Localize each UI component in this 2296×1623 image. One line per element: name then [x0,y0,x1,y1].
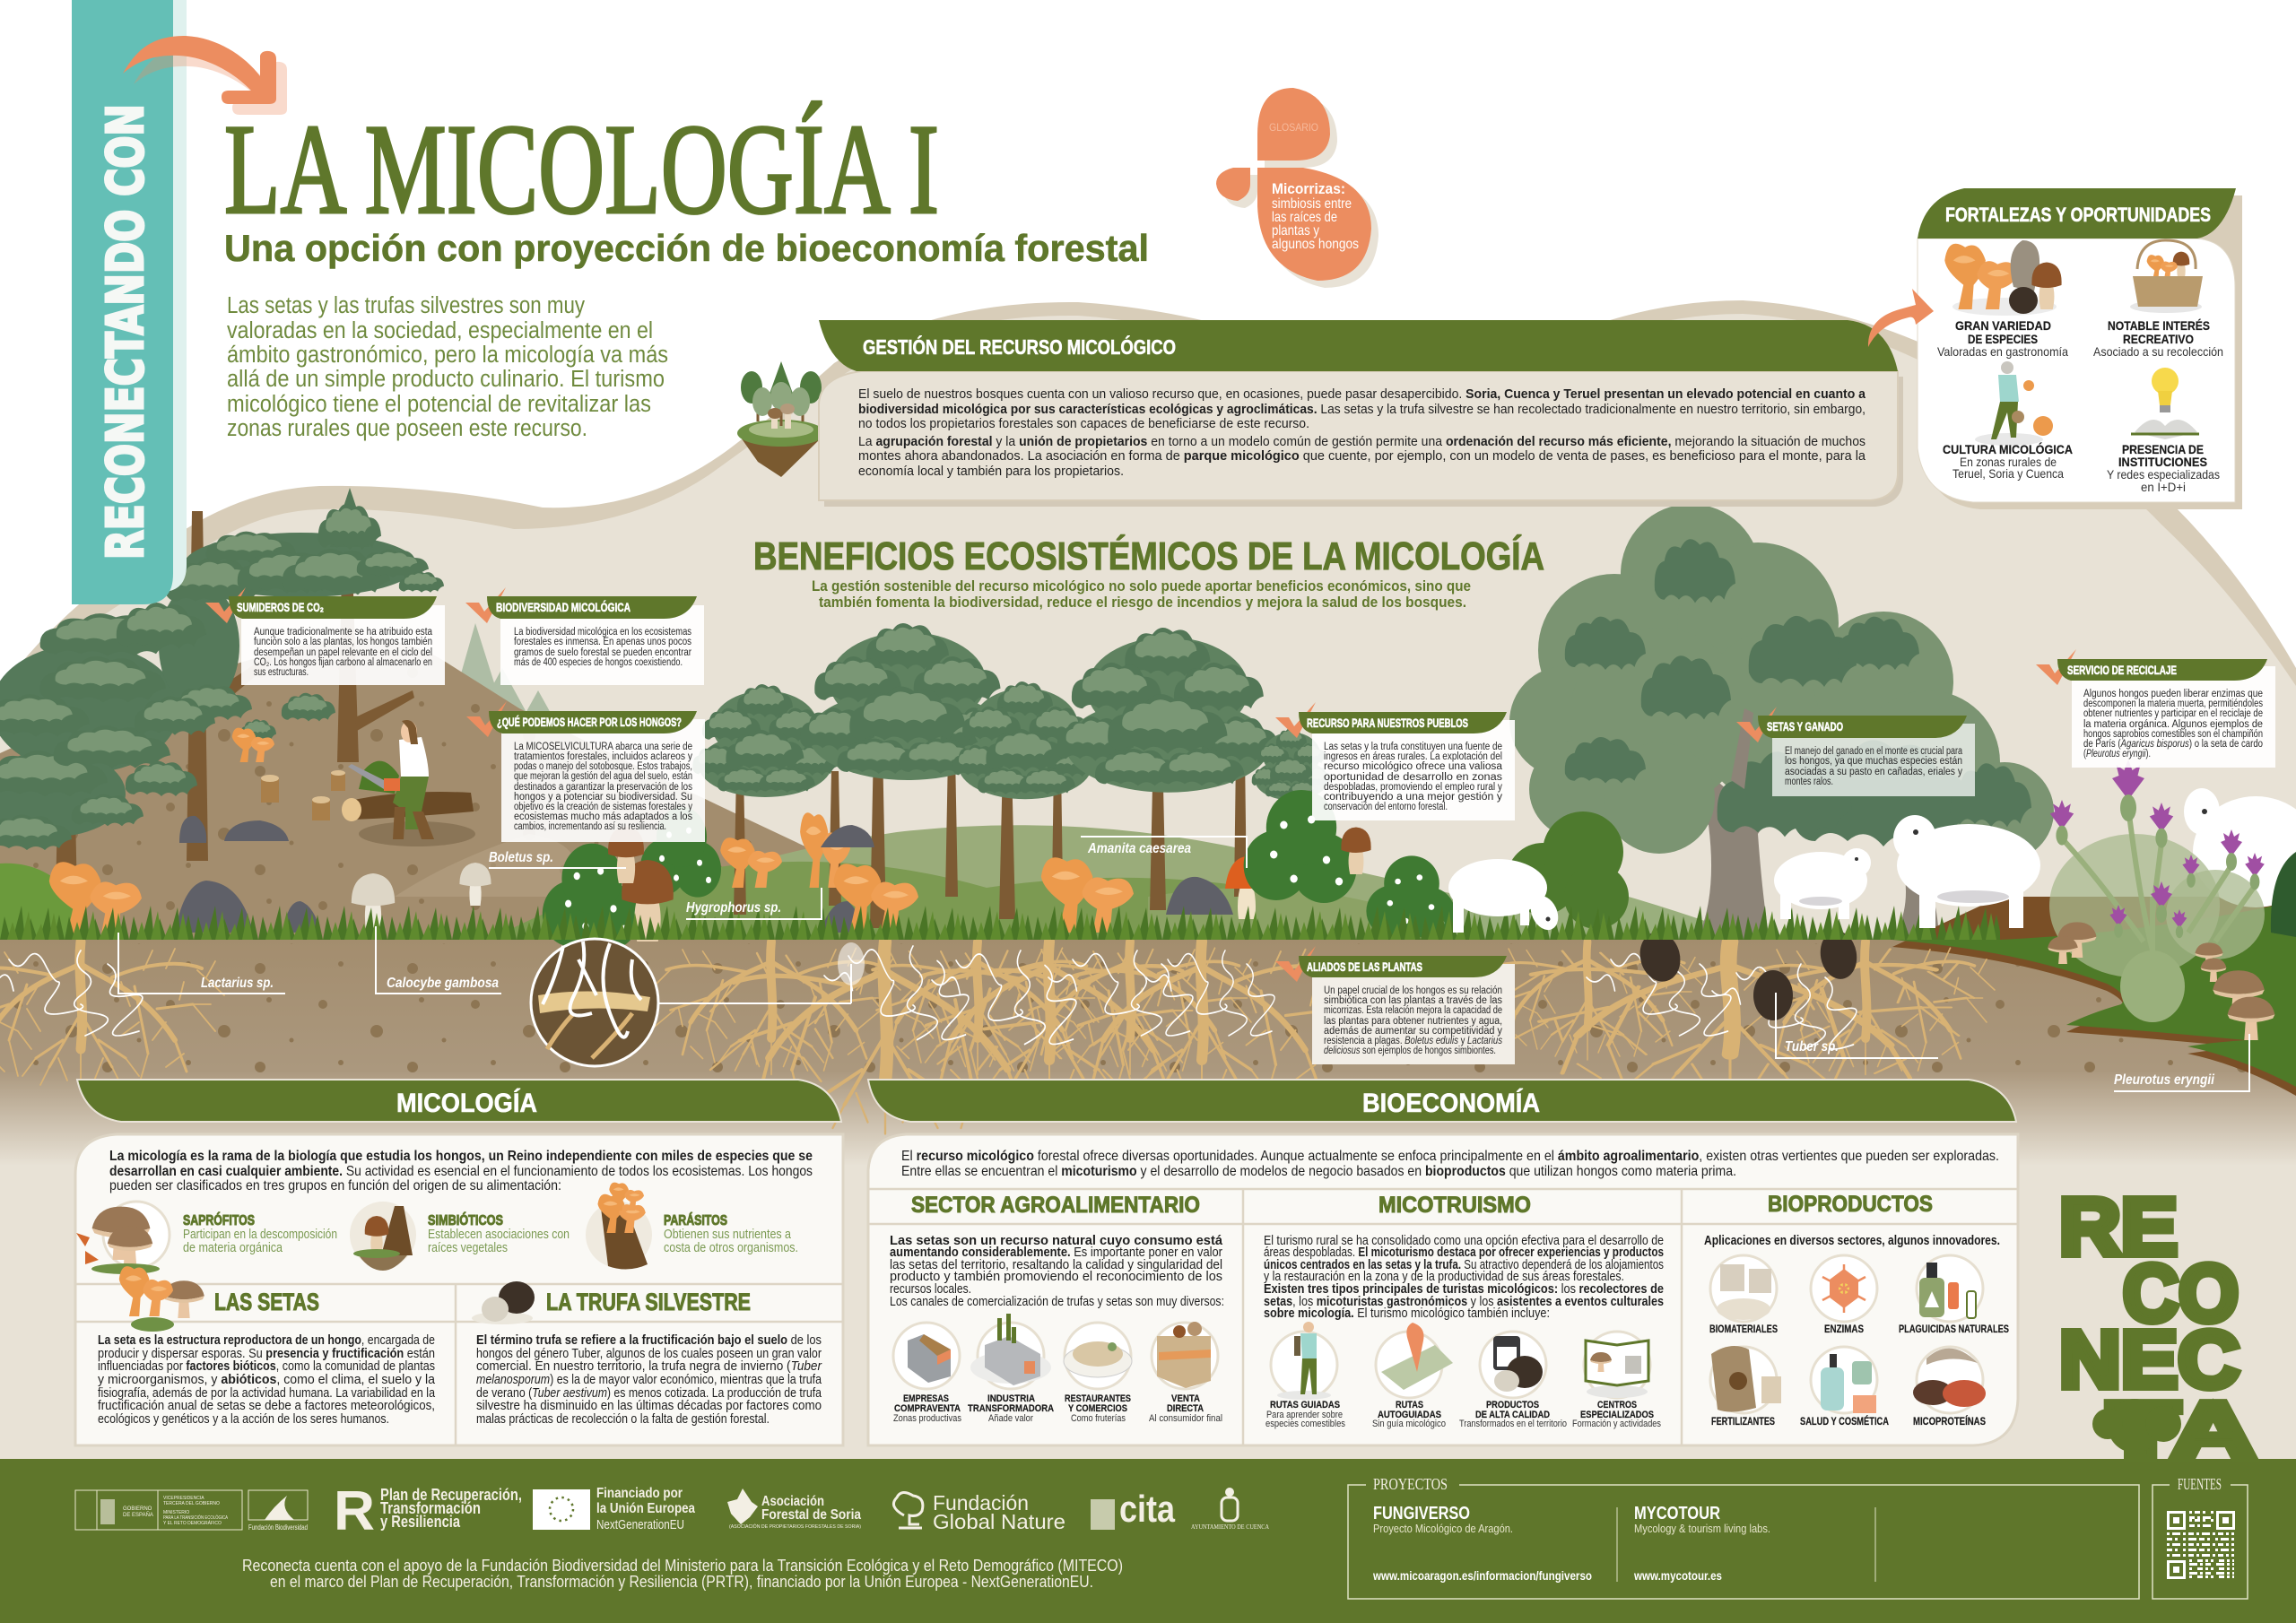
logo: gobierno de españa: PARA LA TRANSICIÓN ECOLÓGICA [163,1515,229,1521]
panel: bioeconomía [868,1080,2018,1445]
logo: gobierno de españa: TERCERA DEL GOBIERNO [163,1501,220,1506]
footer acknowledgement text: en el marco del Plan de Recuperación, Transformación y Resiliencia (PRTR), financiado por la Unión Europea - NextGenerationEU. [270,1573,1093,1591]
card: setas y ganado: los hongos, ya que muchas especies están [1785,756,1962,767]
footer box: proyectos: MYCOTOUR [1634,1504,1720,1523]
text: sector agroalimentario [890,1233,1224,1309]
heading: la trufa silvestre: LA TRUFA SILVESTRE [546,1289,751,1315]
text: sector item labels: Añade valor [988,1413,1033,1424]
footer box: proyectos: Proyecto Micológico de Aragón. [1373,1522,1513,1535]
card: aliados de las plantas [1275,946,1515,1064]
magnified root detail [531,939,865,1066]
heading: bioeconomía: BIOECONOMÍA [1362,1088,1540,1118]
glossary petals [1216,88,1378,288]
logo: cita [1091,1488,1176,1530]
icon: parásitos [586,1183,652,1270]
glossary petals: algunos hongos [1272,237,1359,252]
species labels with leader lines: Hygrophorus sp. [686,900,781,916]
text: food groups: Obtienen sus nutrientes a [664,1227,792,1242]
panel: gestión del recurso micológico [819,320,1903,507]
text: sector item labels: Como fruterías [1071,1413,1126,1424]
species labels with leader lines [118,837,2249,1091]
card: qué podemos hacer por los hongos: destinados a garantizar la preservación de los [514,782,692,793]
logo: plan de recuperación: Transformación [380,1499,481,1517]
text: bioproductos labels [1709,1324,2009,1428]
text: sector agroalimentario: aumentando considerablemente. Es importante poner en valor [890,1245,1222,1260]
text: sector agroalimentario: Los canales de comercialización de trufas y setas son muy diversos: [890,1294,1224,1309]
icon: mushrooms variety [1944,240,2062,316]
text: la trufa body [476,1332,822,1427]
text: micoturismo item labels: CENTROS [1597,1400,1637,1410]
reconecta logo: NEC [2059,1315,2239,1405]
card: recurso para nuestros pueblos: conservación del entorno forestal. [1324,802,1448,812]
text: micoturismo item labels: RUTAS [1396,1400,1423,1410]
card: aliados de las plantas: micorrizas. Esta relación mejora la capacidad de [1324,1005,1502,1016]
text: micoturismo: y la restauración en la zona y de la productividad de sus áreas forestales. [1264,1269,1624,1284]
text: fortalezas labels: Valoradas en gastronomía [1937,344,2068,359]
card: setas y ganado: montes ralos. [1785,777,1833,787]
heading: las setas: LAS SETAS [214,1289,319,1315]
logo: unión europea: NextGenerationEU [596,1517,684,1532]
footer band [0,1459,2296,1623]
card: sumideros de CO2: sus estructuras. [254,667,309,678]
underground soil [0,940,2296,1173]
footer funder logos [75,1480,1269,1542]
footer box: proyectos: FUNGIVERSO [1373,1504,1470,1523]
card: setas y ganado: El manejo del ganado en el monte es crucial para [1785,746,1962,757]
text: micoturismo: setas, los micoturistas gastronómicos y los asistentes a eventos culturales [1264,1294,1664,1309]
text: fortalezas labels: RECREATIVO [2123,332,2194,346]
text: fortalezas labels: Y redes especializadas [2107,467,2220,482]
text: micología intro: La micología es la rama de la biología que estudia los hongos, un Reino independiente con miles de especies que se [109,1149,813,1164]
mushrooms, rocks and bushes [0,790,1629,949]
heading: micotruismo: MICOTRUISMO [1378,1193,1531,1218]
sheep [1448,788,2296,934]
text: fortalezas labels: DE ESPECIES [1968,332,2038,346]
card: qué podemos hacer por los hongos [466,701,705,842]
logo: asociación forestal de soria: (ASOCIACIÓN DE PROPIETARIOS FORESTALES DE SORIA) [729,1523,861,1530]
text: bioproductos labels: BIOMATERIALES [1709,1324,1778,1335]
card: servicio de reciclaje: la materia orgánica. Algunos ejemplos de [2083,719,2263,730]
text: sector agroalimentario: Las setas son un recurso natural cuyo consumo está [890,1233,1223,1248]
text: gestión body: economía local y también para los propietarios. [858,464,1124,479]
card: qué podemos hacer por los hongos: que mejoran la gestión del agua del suelo, están [514,771,692,782]
footer acknowledgement text: Reconecta cuenta con el apoyo de la Fundación Biodiversidad del Ministerio para la Transición Ecológica y el Reto Demográfico (MITECO) [242,1557,1123,1575]
text: fortalezas labels: INSTITUCIONES [2118,455,2207,469]
text: sector item labels [893,1393,1222,1424]
heading: fortalezas: FORTALEZAS Y OPORTUNIDADES [1945,204,2211,226]
text: micoturismo item labels [1265,1400,1661,1429]
logger with chainsaw [179,720,475,846]
text: food groups: raíces vegetales [428,1240,508,1255]
text: la trufa body: melanosporum) es la de mayor valor económico, mientras que la trufa [476,1372,822,1387]
forest on the left [0,488,444,897]
text: bioproductos labels: MICOPROTEÍNAS [1913,1416,1986,1428]
card: qué podemos hacer por los hongos: hongos y a potenciar su biodiversidad. Su [514,792,692,803]
text: fortalezas labels: en I+D+i [2141,480,2186,494]
footer box: proyectos: Mycology & tourism living labs. [1634,1522,1770,1535]
logo: gobierno de españa: MINISTERIO [163,1510,189,1515]
icons: micoturismo [1271,1322,1650,1400]
text: fortalezas labels: GRAN VARIEDAD [1955,318,2051,333]
card: aliados de las plantas: además de aumentar su competitividad y [1324,1026,1502,1037]
text: gestión body: no todos los propietarios forestales son capaces de beneficiarse de este recurso. [858,416,1309,431]
footer box: proyectos: www.micoaragon.es/informacion/fungiverso [1372,1568,1592,1583]
text: food groups: SIMBIÓTICOS [428,1211,503,1228]
card: qué podemos hacer por los hongos: La MICOSELVICULTURA abarca una serie de [514,742,692,752]
card: biodiversidad micológica: forestales es inmensa. En apenas unos pocos [514,637,691,647]
reconecta logo: TA [2108,1386,2256,1476]
icon: trufa [472,1281,535,1324]
card: sumideros de CO2: Aunque tradicionalmente se ha atribuido esta [254,627,433,638]
heading: sector agroalimentario: SECTOR AGROALIMENTARIO [911,1193,1200,1218]
species labels with leader lines: Tuber sp. [1785,1039,1839,1055]
text: sector item labels: VENTA [1171,1393,1200,1404]
text: bioeconomía intro: Entre ellas se encuentran el micoturismo y el desarrollo de modelos de negocio basados en bioproductos que utilizan hongos como materia prima. [901,1164,1736,1179]
text: sector item labels: INDUSTRIA [987,1393,1035,1404]
text: las setas body: fructificación anual de setas se debe a factores meteorológicos, [98,1398,435,1413]
card: biodiversidad micológica [465,587,704,685]
logo: gobierno de españa: Y EL RETO DEMOGRÁFICO [163,1520,222,1526]
left title band [72,0,187,604]
text: bioproductos labels: SALUD Y COSMÉTICA [1800,1416,1889,1428]
panel: micología [75,1080,843,1445]
text: la trufa body: malas prácticas de recolección o la falta de gestión forestal. [476,1411,770,1427]
card: servicio de reciclaje: SERVICIO DE RECICLAJE [2067,663,2177,677]
species labels with leader lines: Boletus sp. [489,850,553,865]
logo: fundación biodiversidad [248,1490,308,1532]
text: micoturismo item labels: ESPECIALIZADOS [1580,1410,1654,1420]
text: gestión body: biodiversidad micológica por sus características ecológicas y agroclimáticas. Las setas y la trufa silvestre se han recolectado tradicionalmente en nuestro territorio, sin embargo, [858,402,1866,417]
card: sumideros de CO2 [205,587,445,685]
reconecta logo [2059,1183,2256,1476]
text: food groups: PARÁSITOS [664,1211,727,1228]
subtitle: Una opción con proyección de bioeconomía forestal [224,227,1149,269]
card: recurso para nuestros pueblos [1275,702,1515,820]
card: qué podemos hacer por los hongos: cambios, incrementando así su resiliencia. [514,821,666,832]
logo: fundación biodiversidad: Fundación Biodiversidad [248,1523,308,1532]
card: qué podemos hacer por los hongos: ¿QUÉ PODEMOS HACER POR LOS HONGOS? [497,715,682,729]
logo: unión europea [533,1486,695,1532]
footer box: fuentes with QR [2152,1475,2248,1599]
intro paragraph: Las setas y las trufas silvestres son muy [227,293,585,318]
intro paragraph: ámbito gastronómico, pero la micología va más [227,343,668,368]
text: sector item labels: TRANSFORMADORA [968,1403,1054,1414]
text: food groups: de materia orgánica [183,1240,283,1255]
text: micoturismo item labels: RUTAS GUIADAS [1270,1400,1340,1410]
text: micoturismo [1264,1233,1664,1321]
heading: gestión [819,320,1898,371]
text: micoturismo item labels: Formación y actividades [1572,1419,1661,1429]
text: micoturismo: áreas despobladas. El micoturismo destaca por ofrecer experiencias y productos [1264,1245,1664,1260]
icon: saprófitos [76,1202,170,1274]
text: sector agroalimentario: producto y también promoviendo el reconocimiento de los [890,1269,1222,1284]
card: servicio de reciclaje: de París (Agaricus bisporus) o la seta de cardo [2083,739,2263,750]
logo: gobierno de españa: VICEPRESIDENCIA [163,1496,204,1501]
text: micoturismo: únicos centrados en las setas y la trufa. Su atractivo dependerá de los alojamientos [1264,1257,1664,1272]
text: food groups: SAPRÓFITOS [183,1211,255,1228]
text: gestión body [858,386,1866,479]
text: sector item labels: COMPRAVENTA [894,1403,961,1414]
card: aliados de las plantas: las plantas para obtener nutrientes y agua, [1324,1016,1502,1027]
text: la trufa body: hongos del género Tuber, algunos de los cuales poseen un gran valor [476,1346,822,1361]
text: food groups [183,1211,798,1255]
text: fortalezas labels: Teruel, Soria y Cuenca [1952,466,2064,481]
logo: fundación global nature [893,1491,1065,1533]
logo: plan de recuperación: Plan de Recuperación, [380,1486,522,1504]
icon: basket [2130,240,2203,313]
text: la trufa body: comercial. En nuestro territorio, la trufa negra de invierno (Tuber [476,1358,822,1374]
species labels with leader lines: Lactarius sp. [201,976,274,991]
text: micología intro: pueden ser clasificados en tres grupos en función del origen de su alimentación: [109,1178,561,1193]
card: servicio de reciclaje: Algunos hongos pueden liberar enzimas que [2083,689,2263,699]
text: la trufa body: silvestre ha disminuido en las últimas décadas por factores como [476,1398,822,1413]
panel: fortalezas y oportunidades [1918,188,2242,509]
card: qué podemos hacer por los hongos: objetivo es la creación de sistemas forestales y [514,802,692,812]
subheading: beneficios [812,577,1471,611]
heading: beneficios ecosistémicos: BENEFICIOS ECOSISTÉMICOS DE LA MICOLOGÍA [753,534,1544,578]
text: bioproductos labels: FERTILIZANTES [1711,1417,1775,1428]
truffles [1635,927,1860,1020]
glossary petals: plantas y [1272,223,1319,239]
thistle plants and pleurotus [2048,759,2296,1040]
woodland in the middle [692,623,1331,928]
intro paragraph: allá de un simple producto culinario. El turismo [227,367,665,392]
card: setas y ganado: asociadas a su pasto en cañadas, eriales y [1785,767,1962,777]
text: fortalezas labels [1937,318,2223,494]
heading: bioeconomía [868,1080,2016,1122]
distant pale pine forest [451,623,561,731]
island illustration [737,361,825,477]
text: micología intro: desarrollan en casi cualquier ambiente. Su actividad es esencial en el funcionamiento de todos los ecosistemas. Los hongos [109,1164,813,1179]
intro paragraph: micológico tiene el potencial de revitalizar las [227,392,651,417]
logo: gobierno de españa: DE ESPAÑA [123,1512,153,1518]
card: recurso para nuestros pueblos: Las setas y la trufa constituyen una fuente de [1324,742,1502,752]
heading: gestión: GESTIÓN DEL RECURSO MICOLÓGICO [863,334,1176,359]
card: recurso para nuestros pueblos: ingresos en áreas rurales. La explotación del [1324,751,1502,762]
text: bioeconomía intro: El recurso micológico forestal ofrece diversas oportunidades. Aunque actualmente se enfoca principalmente en el ámbito agroalimentario, existen otras vertientes que pueden ser exploradas. [901,1149,1999,1164]
card: aliados de las plantas: resistencia a plagas. Boletus edulis y Lactarius [1324,1036,1502,1046]
logo: cita: cita [1119,1488,1176,1530]
text: sector agroalimentario: recursos locales. [890,1281,971,1297]
glossary petals: GLOSARIO [1269,121,1318,134]
logo: unión europea: Financiado por [596,1486,683,1501]
text: food groups: Establecen asociaciones con [428,1227,570,1242]
logo: plan de recuperación: y Resiliencia [380,1513,461,1531]
card: aliados de las plantas: deliciosus son ejemplos de hongos simbiontes. [1324,1046,1496,1056]
text: sector item labels: RESTAURANTES [1065,1393,1131,1404]
text: micología intro [109,1149,813,1193]
subheading: beneficios: también fomenta la biodiversidad, reduce el riesgo de incendios y mejora la salud de los bosques. [819,594,1466,611]
text: sector item labels: Al consumidor final [1149,1413,1222,1424]
text: sector item labels: EMPRESAS [903,1393,949,1404]
intro paragraph [227,293,668,441]
card: recurso para nuestros pueblos: contribuyendo a una mejor gestión y [1324,792,1502,803]
icon: QR code [2167,1512,2234,1578]
card: recurso para nuestros pueblos: RECURSO PARA NUESTROS PUEBLOS [1307,716,1468,730]
text: las setas body: fisiografía, además de por la actividad humana. La variabilidad en la [98,1385,436,1401]
text: food groups: costa de otros organismos. [664,1240,798,1255]
text: sector agroalimentario: las setas del territorio, resaltando la calidad y singularidad del [890,1257,1222,1272]
card: aliados de las plantas: simbiótica con las plantas a través de las [1324,995,1502,1006]
card: aliados de las plantas: ALIADOS DE LAS PLANTAS [1307,959,1422,974]
card: servicio de reciclaje: (Pleurotus eryngii). [2083,749,2151,759]
card: qué podemos hacer por los hongos: ecosistemas mucho más adaptados a los [514,812,692,822]
logo: asociación forestal de soria: Forestal de Soria [761,1507,861,1523]
text: micoturismo item labels: PRODUCTOS [1486,1400,1539,1410]
footer box: proyectos [1348,1475,2139,1599]
logo: unión europea: la Unión Europea [596,1501,695,1516]
icons: sector agroalimentario [893,1314,1218,1389]
text: sector item labels: Zonas productivas [893,1413,961,1424]
reconecta logo: RE [2059,1183,2178,1272]
text: micoturismo: sobre micología. El turismo micológico también incluye: [1264,1306,1550,1321]
species labels with leader lines: Amanita caesarea [1087,841,1191,856]
card: recurso para nuestros pueblos: despobladas, promoviendo el empleo rural y [1324,782,1502,793]
card: biodiversidad micológica: gramos de suelo forestal se pueden encontrar [514,647,691,658]
green meadow hills [491,825,1758,940]
text: bioproductos labels: PLAGUICIDAS NATURALES [1899,1324,2009,1335]
text: gestión body: El suelo de nuestros bosques cuenta con un valioso recurso que, en ocasiones, puede pasar desapercibido. Soria, Cuenca y Teruel presentan un elevado potencial en cuanto a [858,386,1866,402]
text: bioproductos intro: Aplicaciones en diversos sectores, algunos innovadores. [1704,1233,2000,1248]
brown hillside [0,638,834,940]
arrow to fortalezas [1868,289,1934,347]
text: las setas body: influenciadas por factores bióticos, como la comunidad de plantas [98,1358,435,1374]
text: fortalezas labels: CULTURA MICOLÓGICA [1943,441,2073,456]
grass strip [0,904,2000,942]
text: sector item labels: DIRECTA [1167,1403,1204,1414]
species labels with leader lines: Pleurotus eryngii [2114,1072,2214,1088]
species labels with leader lines: Calocybe gambosa [387,976,499,991]
card: servicio de reciclaje [2036,649,2275,768]
card: recurso para nuestros pueblos: oportunidad de desarrollo en zonas [1324,772,1502,783]
text: las setas body [98,1332,436,1427]
logo: fundación global nature: Global Nature [933,1510,1065,1533]
text: micoturismo item labels: AUTOGUIADAS [1378,1410,1441,1420]
text: micoturismo: El turismo rural se ha consolidado como una opción efectiva para el desarrollo de [1264,1233,1664,1248]
logo: ayuntamiento de cuenca: AYUNTAMIENTO DE CUENCA [1191,1523,1269,1531]
intro paragraph: valoradas en la sociedad, especialmente en el [227,318,653,343]
glossary petals: las raíces de [1272,210,1337,225]
footer acknowledgement text [242,1557,1123,1591]
text: micoturismo: Existen tres tipos principales de turistas micológicos: los recolectores de [1264,1281,1664,1297]
logo: gobierno de españa [75,1490,242,1530]
text: fortalezas labels: PRESENCIA DE [2122,442,2204,456]
intro paragraph: zonas rurales que poseen este recurso. [227,416,587,441]
footer box: proyectos: PROYECTOS [1373,1475,1448,1493]
heading: bioproductos: BIOPRODUCTOS [1768,1192,1933,1217]
reconecta logo: CO [2123,1249,2239,1339]
text: fortalezas labels: NOTABLE INTERÉS [2108,318,2210,333]
subheading: beneficios: La gestión sostenible del recurso micológico no solo puede aportar beneficios económicos, sino que [812,577,1471,595]
text: micoturismo item labels: Sin guía micológico [1372,1419,1446,1429]
text: sector item labels: Y COMERCIOS [1068,1403,1127,1414]
logo: plan de recuperación [334,1480,522,1542]
text: bioeconomía intro [901,1149,1999,1179]
card: biodiversidad micológica: más de 400 especies de hongos coexistiendo. [514,657,683,668]
heading: fortalezas [1918,188,2236,239]
text: gestión body: montes ahora abandonados. La asociación en forma de parque micológico que cuente, por ejemplo, con un modelo de venta de pases, es beneficioso para el monte, para la [858,448,1866,464]
card: aliados de las plantas: Un papel crucial de los hongos es su relación [1324,985,1502,996]
card: sumideros de CO2: CO₂. Los hongos fijan carbono al almacenarlo en [254,657,432,668]
logo: plan de recuperación: R [334,1480,375,1542]
text: las setas body: producir y dispersar esporas. Su presencia y fructificación están [98,1346,435,1361]
text: bioproductos labels: ENZIMAS [1824,1324,1864,1335]
card: qué podemos hacer por los hongos: podas o manejo del sotobosque. Estos trabajos, [514,761,692,772]
main title: LA MICOLOGÍA I [224,99,939,241]
icon: woman gathering [1975,361,2053,446]
orange title arrow [123,36,287,115]
card: sumideros de CO2: desempeñan un papel relevante en el ciclo del [254,647,432,658]
logo: asociación forestal de soria [727,1488,861,1530]
logo: ayuntamiento de cuenca [1191,1488,1269,1531]
icon: setas group [119,1266,204,1332]
heading: micología [77,1080,841,1122]
text: gestión body: La agrupación forestal y la unión de propietarios en torno a un modelo común de gestión permite una ordenación del recurso más eficiente, mejorando la situación de muchos [858,434,1866,449]
logo: gobierno de españa: GOBIERNO [123,1506,152,1512]
glossary petals: Micorrizas: [1272,180,1345,197]
text: micoturismo item labels: Transformados en el territorio [1459,1419,1567,1429]
card: servicio de reciclaje: obtener nutrientes y participar en el reciclaje de [2083,708,2263,719]
text: la trufa body: El término trufa se refiere a la fructificación bajo el suelo de los [476,1332,822,1348]
card: setas y ganado: SETAS Y GANADO [1767,719,1843,733]
card: sumideros de CO2: función solo a las plantas, los hongos también [254,637,432,647]
text: micoturismo item labels: Para aprender sobre [1266,1410,1343,1420]
logo: asociación forestal de soria: Asociación [761,1494,824,1509]
text: las setas body: La seta es la estructura reproductora de un hongo, encargada de [98,1332,435,1348]
text: food groups: Participan en la descomposición [183,1227,337,1242]
text: fortalezas labels: Asociado a su recolección [2093,344,2223,359]
card: sumideros de CO2: SUMIDEROS DE CO₂ [237,600,324,614]
card: biodiversidad micológica: BIODIVERSIDAD MICOLÓGICA [496,599,631,614]
icons: bioproductos [1710,1255,1986,1413]
text: micoturismo item labels: DE ALTA CALIDAD [1475,1410,1550,1420]
text: fortalezas labels: En zonas rurales de [1960,455,2057,469]
text: la trufa body: de verano (Tuber aestivum) es menos cotizada. La producción de trufa [476,1385,822,1401]
icon: simbióticos [350,1202,416,1271]
text: las setas body: y microorganismos, y abióticos, como el clima, el suelo y la [98,1372,436,1387]
card: qué podemos hacer por los hongos: tratamientos forestales, incluidos aclareos y [514,751,692,762]
roots and mycelium [0,942,1995,1133]
card: setas y ganado [1736,707,1975,796]
big oak tree [1509,504,2054,940]
card: biodiversidad micológica: La biodiversidad micológica en los ecosistemas [514,627,691,638]
text: las setas body: ecológicos y genéticos y a la acción de los seres humanos. [98,1411,389,1427]
glossary petals: simbiosis entre [1272,196,1352,212]
card: recurso para nuestros pueblos: recurso micológico ofrece una valiosa [1324,761,1503,772]
logo: fundación global nature: Fundación [933,1491,1029,1515]
heading: micología: MICOLOGÍA [396,1088,537,1118]
green slope on the right [1892,897,2296,1096]
icon: light bulb over book [2131,368,2199,439]
text: micoturismo item labels: especies comestibles [1265,1419,1345,1429]
footer box: fuentes with QR: FUENTES [2178,1475,2222,1493]
footer box: proyectos: www.mycotour.es [1633,1568,1722,1583]
